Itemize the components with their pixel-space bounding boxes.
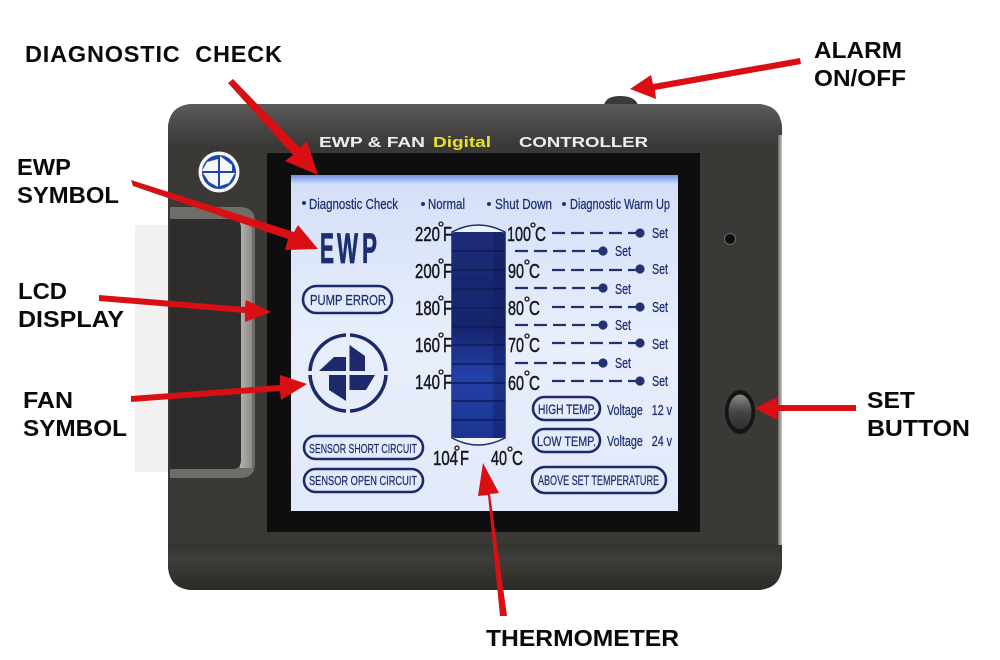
label: LCD display: DISPLAY (18, 306, 124, 332)
arrow: LCD display (99, 295, 271, 322)
sensor open circuit badge (304, 469, 423, 492)
device title: EWP & FAN (319, 134, 425, 151)
set point indicators: Set (615, 355, 632, 372)
label: alarm on/off: ON/OFF (814, 65, 906, 91)
high temp badge: HIGH TEMP. (538, 401, 596, 417)
celsius scale: C (529, 261, 540, 283)
above set temperature badge (532, 467, 666, 493)
fahrenheit scale: 140 (415, 372, 440, 394)
arrow: fan symbol (131, 375, 307, 402)
voltage 12v: Voltage 12 v (607, 402, 672, 419)
status row (302, 196, 670, 213)
celsius scale: C (529, 298, 540, 320)
label: diagnostic check: DIAGNOSTIC CHECK (25, 41, 282, 67)
status row: Normal (428, 196, 465, 213)
fahrenheit scale: F (443, 224, 452, 246)
device body (135, 96, 782, 590)
icon: fan symbol (305, 330, 391, 416)
label: EWP symbol: SYMBOL (17, 182, 119, 208)
sensor short circuit badge (304, 436, 423, 459)
label: fan symbol (23, 387, 127, 441)
set point indicators: Set (652, 299, 669, 316)
label: set button: BUTTON (867, 415, 970, 441)
status row: Shut Down (495, 196, 552, 213)
set point indicators: Set (652, 225, 669, 242)
set point indicators: Set (652, 373, 669, 390)
label: alarm on/off (814, 37, 906, 91)
fahrenheit scale: 200 (415, 261, 440, 283)
device title: Digital (433, 134, 491, 151)
set point indicators (515, 225, 669, 390)
status row: Diagnostic Warm Up (570, 196, 670, 213)
fahrenheit scale: F (443, 335, 452, 357)
label: fan symbol: FAN (23, 387, 73, 413)
set point indicators: Set (615, 317, 632, 334)
fahrenheit scale: 160 (415, 335, 440, 357)
icon: brand logo (198, 152, 240, 192)
pump error badge (303, 286, 392, 313)
low temp badge: LOW TEMP. (537, 433, 596, 449)
device title (319, 134, 648, 151)
screen bezel (267, 153, 700, 532)
arrow: set button (755, 397, 856, 420)
celsius scale: C (512, 448, 523, 470)
celsius scale: 40 (491, 448, 507, 470)
EWP symbol: E (320, 225, 334, 273)
set point indicators: Set (615, 281, 632, 298)
celsius scale: 70 (508, 335, 524, 357)
label: set button: SET (867, 387, 916, 413)
high temp badge (533, 397, 600, 420)
arrow: alarm on/off (630, 58, 801, 99)
arrow: EWP symbol (131, 180, 318, 250)
celsius scale: 100 (507, 224, 531, 246)
sensor open circuit badge: SENSOR OPEN CIRCUIT (309, 473, 417, 488)
celsius scale (491, 223, 546, 470)
label: LCD display: LCD (18, 278, 67, 304)
sensor short circuit badge: SENSOR SHORT CIRCUIT (309, 441, 417, 456)
celsius scale: C (535, 224, 546, 246)
set point indicators: Set (652, 336, 669, 353)
celsius scale: C (529, 373, 540, 395)
celsius scale: 80 (508, 298, 524, 320)
fahrenheit scale: F (443, 372, 452, 394)
label: LCD display (18, 278, 124, 332)
EWP symbol (320, 225, 377, 273)
celsius scale: 60 (508, 373, 524, 395)
fahrenheit scale: 104 (433, 448, 458, 470)
celsius scale: 90 (508, 261, 524, 283)
fahrenheit scale: 180 (415, 298, 440, 320)
celsius scale: C (529, 335, 540, 357)
EWP symbol: W (337, 225, 358, 273)
device title: CONTROLLER (519, 134, 648, 151)
label: EWP symbol: EWP (17, 154, 71, 180)
set point indicators: Set (652, 261, 669, 278)
status row: Diagnostic Check (309, 196, 398, 213)
icon: sensor hole (724, 234, 736, 244)
fahrenheit scale: F (443, 261, 452, 283)
label: set button (867, 387, 970, 441)
pump error badge: PUMP ERROR (310, 292, 386, 309)
label: thermometer: THERMOMETER (486, 625, 679, 651)
fahrenheit scale (415, 222, 469, 470)
label: EWP symbol (17, 154, 119, 208)
EWP symbol: P (362, 225, 377, 273)
label: alarm on/off: ALARM (814, 37, 902, 63)
icon: set button (725, 390, 755, 434)
set point indicators: Set (615, 243, 632, 260)
voltage 24v: Voltage 24 v (607, 433, 672, 450)
panel: LCD display (291, 175, 678, 511)
fahrenheit scale: 220 (415, 224, 440, 246)
label: fan symbol: SYMBOL (23, 415, 127, 441)
fahrenheit scale: F (443, 298, 452, 320)
above set temperature badge: ABOVE SET TEMPERATURE (538, 472, 659, 488)
low temp badge (533, 429, 600, 452)
grip recess (170, 207, 255, 478)
arrow: diagnostic check (228, 79, 318, 175)
thermometer tube (452, 225, 505, 445)
fahrenheit scale: F (460, 448, 469, 470)
arrow: thermometer (478, 463, 507, 616)
